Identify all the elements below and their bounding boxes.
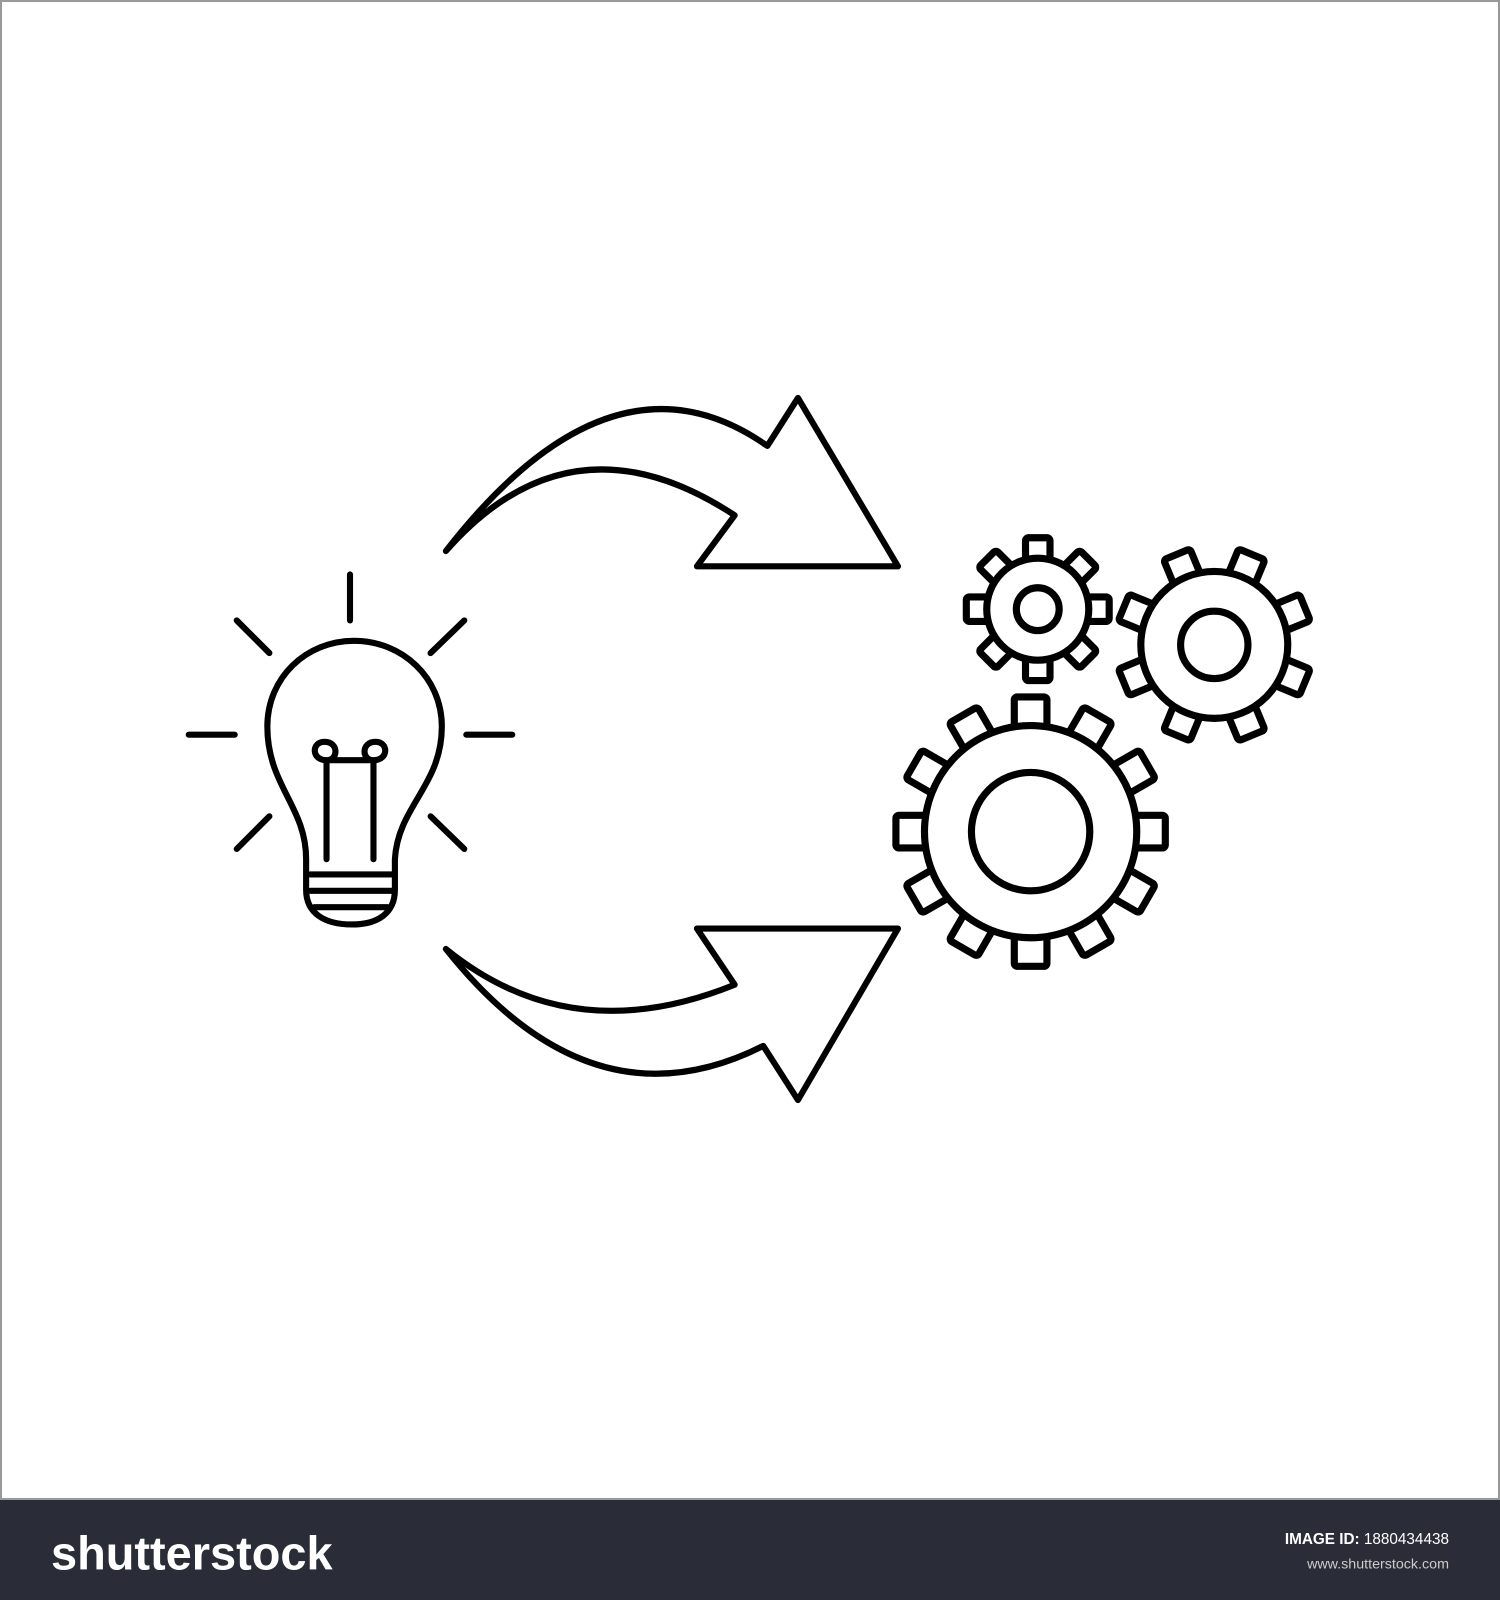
- footer image id: IMAGE ID: 1880434438: [1285, 1531, 1449, 1548]
- footer logo text: shutterstock: [51, 1527, 334, 1579]
- footer bar: [0, 1500, 1500, 1600]
- icon: light bulb: [189, 574, 512, 924]
- footer url: www.shutterstock.com: [1306, 1556, 1449, 1572]
- icon: gears: [896, 538, 1310, 966]
- arrow: top: [446, 398, 898, 566]
- arrow: bottom: [446, 929, 898, 1100]
